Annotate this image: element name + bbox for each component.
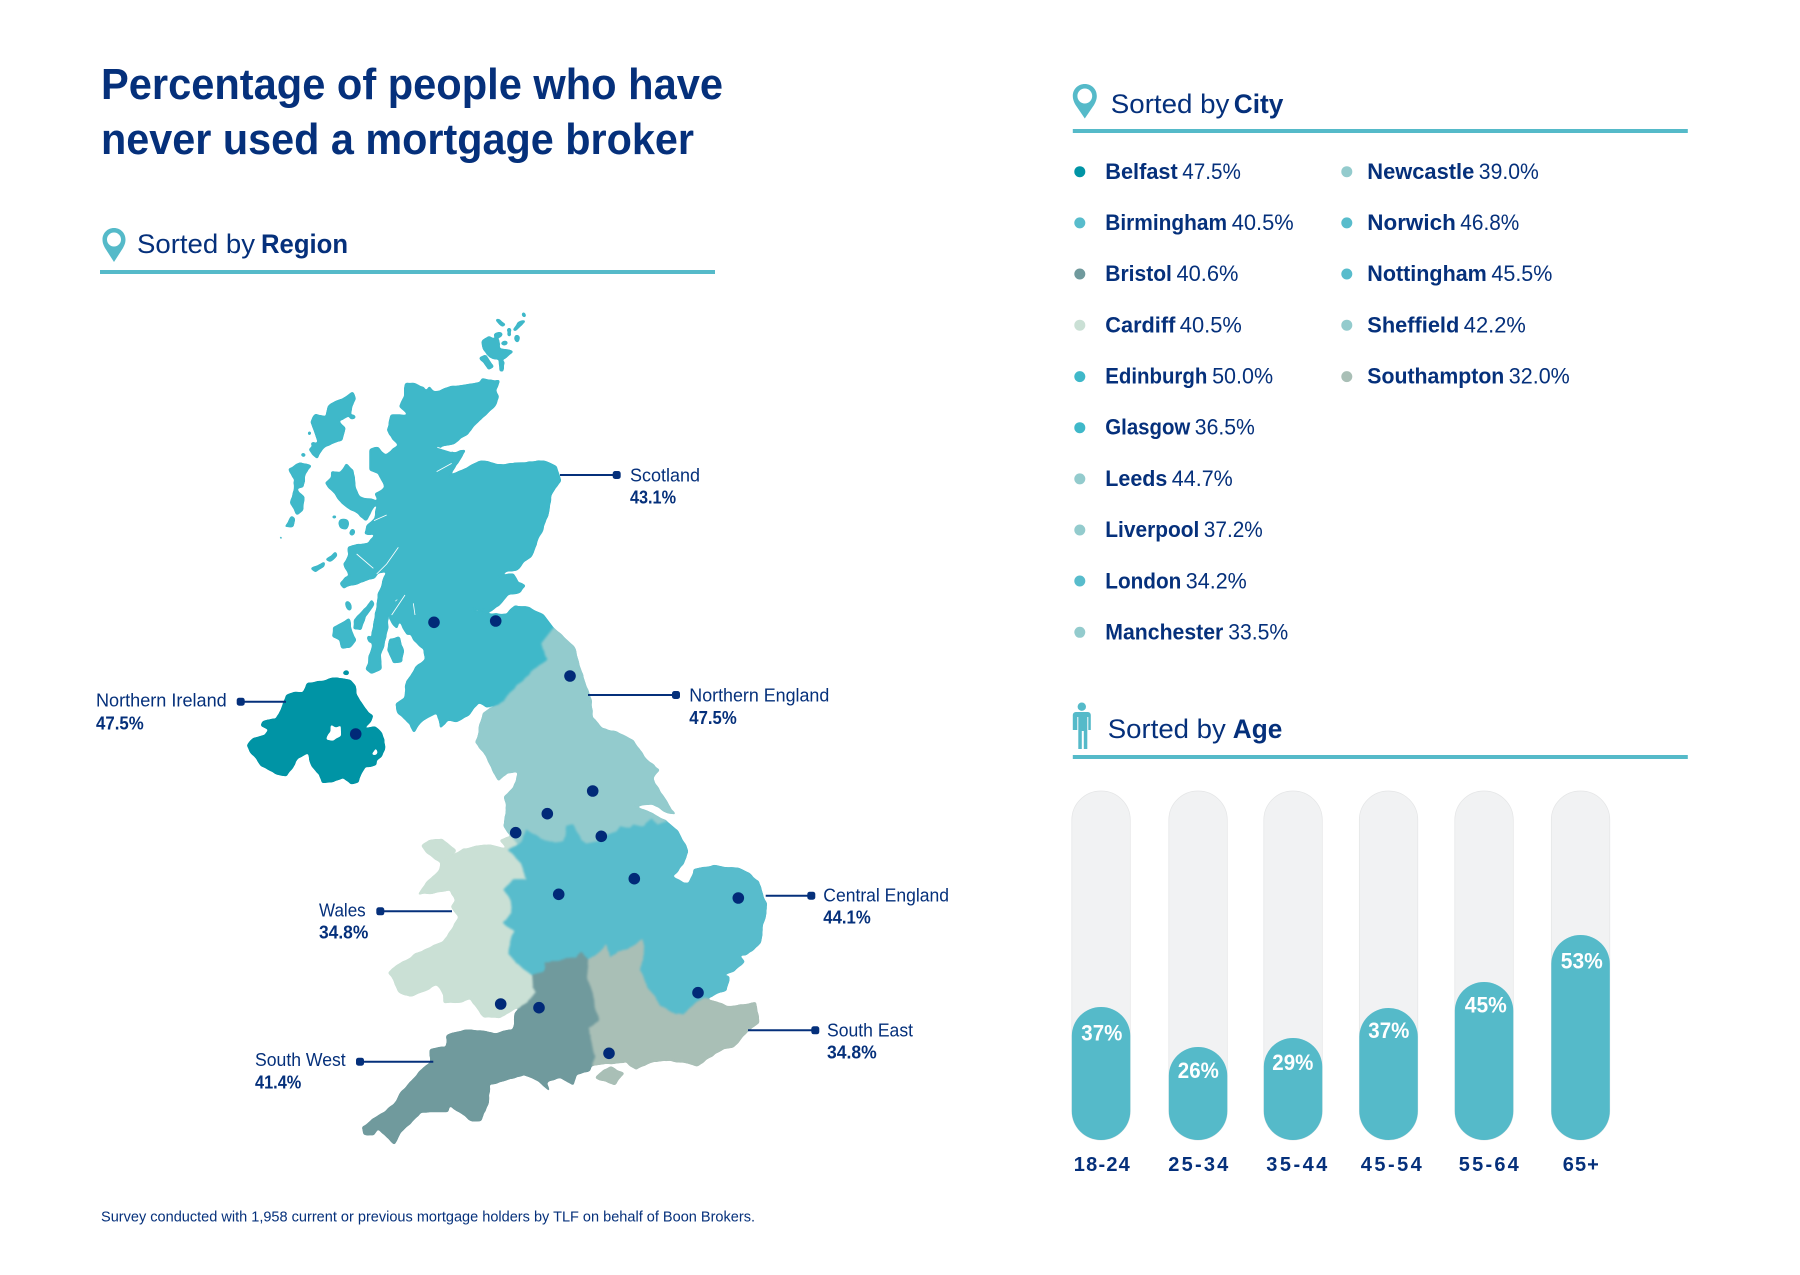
- region: Central England: [503, 818, 767, 1015]
- callout: Northern Ireland: Northern Ireland: [96, 691, 227, 711]
- callout: Northern England: [588, 686, 829, 728]
- list item: Sheffield: 42.2%: [1464, 312, 1526, 338]
- callout: Northern England: 47.5%: [689, 708, 737, 728]
- region: Wales: [388, 837, 537, 1017]
- callout: Scotland: Scotland: [630, 465, 700, 485]
- list item: Glasgow: [1074, 415, 1255, 440]
- callout: Wales: 34.8%: [319, 923, 368, 943]
- list item: Manchester: Manchester: [1105, 619, 1224, 644]
- region: Scotland: [281, 313, 561, 733]
- list item: Birmingham: Birmingham: [1105, 210, 1227, 235]
- list item: Liverpool: [1074, 517, 1263, 542]
- bar: 18-24: 37%: [1081, 1021, 1122, 1046]
- callout: Central England: [766, 885, 949, 928]
- bar: 55-64: 45%: [1465, 993, 1507, 1018]
- callout: South West: South West: [255, 1050, 346, 1070]
- bar: 45-54: 37%: [1368, 1018, 1409, 1043]
- callout: Northern England: Northern England: [689, 686, 829, 706]
- bar: 25-34: 26%: [1178, 1058, 1219, 1083]
- heading: sorted by city: City: [1234, 89, 1283, 119]
- list item: Leeds: [1074, 466, 1233, 491]
- bar: 45-54: [1359, 791, 1423, 1176]
- list item: Liverpool: Liverpool: [1105, 517, 1199, 542]
- region: Northern Ireland: [247, 671, 385, 785]
- callout: South West: 41.4%: [255, 1072, 301, 1092]
- list item: Southampton: [1341, 364, 1570, 389]
- bar: 35-44: 29%: [1272, 1050, 1313, 1075]
- list item: Nottingham: [1341, 261, 1552, 286]
- list item: Newcastle: [1341, 159, 1539, 184]
- icon: region location pin: [102, 228, 126, 262]
- heading: sorted by age: Sorted by: [1108, 714, 1226, 744]
- list item: London: London: [1105, 568, 1181, 593]
- icon: city location pin: [1073, 84, 1097, 118]
- list item: Cardiff: Cardiff: [1105, 312, 1176, 338]
- list item: Glasgow: 36.5%: [1195, 415, 1255, 440]
- list item: Leeds: 44.7%: [1172, 466, 1233, 491]
- bar: 65+: [1551, 791, 1610, 1176]
- bar: 55-64: 55-64: [1459, 1154, 1520, 1176]
- list item: Edinburgh: [1074, 364, 1273, 389]
- list item: Norwich: Norwich: [1367, 210, 1456, 235]
- region: South West: [363, 952, 598, 1143]
- list item: London: [1074, 568, 1247, 593]
- heading: sorted by region: Sorted by: [137, 229, 255, 259]
- bar: 35-44: [1264, 791, 1328, 1176]
- map of the UK: [247, 313, 767, 1143]
- callout: Central England: 44.1%: [823, 908, 871, 928]
- list item: Birmingham: [1074, 210, 1294, 235]
- region: South East: [577, 939, 758, 1085]
- list item: Bristol: [1074, 261, 1238, 286]
- title: [101, 60, 723, 164]
- list item: Edinburgh: 50.0%: [1212, 364, 1273, 389]
- bar: 65+: 53%: [1561, 949, 1603, 974]
- callout: South East: [748, 1020, 913, 1062]
- callout: Central England: Central England: [823, 885, 949, 905]
- list item: Southampton: Southampton: [1367, 364, 1504, 389]
- list item: Glasgow: Glasgow: [1105, 415, 1191, 440]
- list item: Southampton: 32.0%: [1509, 364, 1570, 389]
- bar: 65+: 65+: [1563, 1154, 1599, 1176]
- list item: Belfast: [1074, 159, 1241, 184]
- heading: sorted by age: Age: [1233, 714, 1282, 744]
- icon: person: [1073, 702, 1091, 749]
- map regions: [247, 313, 767, 1143]
- list item: Norwich: 46.8%: [1460, 210, 1519, 235]
- bar: 18-24: [1072, 791, 1131, 1176]
- heading: sorted by region: Region: [261, 229, 348, 259]
- callout: Scotland: [560, 465, 700, 507]
- callout: Northern Ireland: 47.5%: [96, 713, 144, 733]
- list item: Nottingham: 45.5%: [1491, 261, 1552, 286]
- callout: Northern Ireland: [96, 691, 286, 733]
- bar: 45-54: 45-54: [1361, 1154, 1423, 1176]
- heading: sorted by region: [100, 228, 715, 274]
- list item: London: 34.2%: [1186, 568, 1247, 593]
- list item: Edinburgh: Edinburgh: [1105, 364, 1207, 389]
- bar: 25-34: 25-34: [1168, 1154, 1229, 1176]
- callout: Wales: Wales: [319, 901, 366, 921]
- list item: Liverpool: 37.2%: [1204, 517, 1263, 542]
- title: Percentage of people who have: [101, 60, 723, 109]
- list item: Sheffield: Sheffield: [1367, 312, 1459, 338]
- list item: Newcastle: 39.0%: [1479, 159, 1539, 184]
- city markers: [350, 615, 744, 1059]
- region: Northern England: [476, 628, 675, 850]
- city list: [1074, 159, 1570, 644]
- list item: Bristol: Bristol: [1105, 261, 1172, 286]
- list item: Manchester: 33.5%: [1228, 619, 1288, 644]
- list item: Newcastle: Newcastle: [1367, 159, 1474, 184]
- title: never used a mortgage broker: [101, 115, 694, 164]
- list item: Cardiff: [1074, 312, 1242, 338]
- heading: sorted by city: [1073, 84, 1688, 133]
- list item: Sheffield: [1341, 312, 1526, 338]
- list item: Bristol: 40.6%: [1176, 261, 1238, 286]
- list item: Leeds: Leeds: [1105, 466, 1167, 491]
- list item: Nottingham: Nottingham: [1367, 261, 1487, 286]
- footnote: Survey conducted with 1,958 current or previous mortgage holders by TLF on behalf of Boon Brokers.: [101, 1210, 755, 1226]
- bar: 25-34: [1168, 791, 1229, 1176]
- heading: sorted by city: Sorted by: [1111, 89, 1230, 119]
- list item: Belfast: Belfast: [1105, 159, 1178, 184]
- callout: South East: South East: [827, 1020, 913, 1040]
- list item: Norwich: [1341, 210, 1519, 235]
- bar: 35-44: 35-44: [1266, 1154, 1328, 1176]
- bar: 55-64: [1455, 791, 1520, 1176]
- bar chart: age: [1072, 791, 1610, 1176]
- list item: Cardiff: 40.5%: [1180, 312, 1242, 338]
- bar: 18-24: 18-24: [1074, 1154, 1131, 1176]
- callout: South West: [255, 1050, 433, 1092]
- callout: South East: 34.8%: [827, 1042, 877, 1062]
- callout: Scotland: 43.1%: [630, 487, 676, 507]
- heading: sorted by age: [1073, 702, 1688, 759]
- callout: Wales: [319, 901, 452, 943]
- list item: Birmingham: 40.5%: [1232, 210, 1294, 235]
- list item: Manchester: [1074, 619, 1288, 644]
- list item: Belfast: 47.5%: [1182, 159, 1241, 184]
